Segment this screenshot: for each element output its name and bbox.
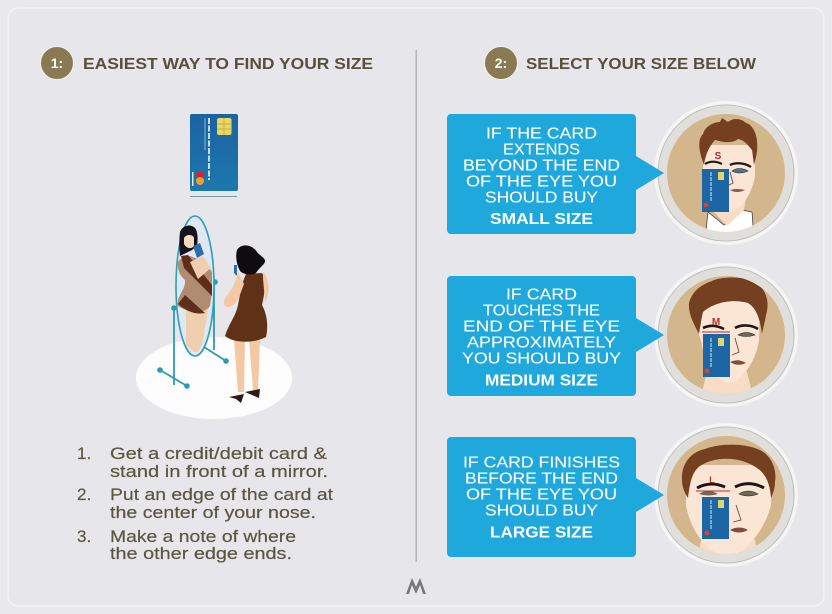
callout: small size: OF THE EYE YOU — [466, 174, 617, 190]
callout: medium size: IF CARD — [506, 286, 577, 304]
instructions list: Get a credit/debit card & — [110, 444, 328, 463]
heading 1: EASIEST WAY TO FIND YOUR SIZE — [83, 56, 373, 73]
heading 1: 1: — [51, 55, 63, 71]
illustration: woman at mirror — [136, 216, 292, 419]
instructions list: stand in front of a mirror. — [110, 462, 328, 481]
portrait: medium size: M — [712, 317, 720, 328]
heading 1 — [40, 46, 373, 80]
callout: medium size — [447, 276, 664, 396]
portrait: medium size — [654, 263, 798, 407]
instructions list: 3. — [77, 527, 91, 546]
instructions list: 1. — [77, 444, 91, 463]
portrait: large size: L — [709, 475, 715, 485]
callout: medium size: MEDIUM SIZE — [485, 372, 598, 390]
heading 2 — [484, 46, 757, 80]
floor ellipse — [136, 337, 292, 419]
callout: small size: IF THE CARD — [486, 126, 597, 142]
heading 2: SELECT YOUR SIZE BELOW — [526, 56, 757, 73]
callout: small size: EXTENDS — [503, 142, 580, 158]
instructions list: Make a note of where — [110, 527, 296, 546]
callout: large size: IF CARD FINISHES — [463, 454, 620, 472]
instructions list — [77, 444, 333, 563]
callout: large size: SHOULD BUY — [485, 502, 598, 520]
callout: small size — [447, 114, 664, 234]
brand logo — [406, 578, 426, 594]
instructions list: the other edge ends. — [110, 544, 292, 563]
callout: small size: SHOULD BUY — [485, 190, 598, 206]
illustration: credit card — [190, 114, 238, 196]
mirror — [157, 216, 229, 389]
portrait: small size: S — [715, 151, 722, 162]
instructions list: the center of your nose. — [110, 503, 316, 522]
instructions list: 2. — [77, 485, 91, 504]
heading 2: 2: — [495, 55, 507, 71]
callout: medium size: APPROXIMATELY — [467, 334, 616, 352]
reflection — [178, 225, 212, 352]
callout: small size: BEYOND THE END — [463, 158, 620, 174]
callout: large size — [447, 437, 664, 557]
instructions list: Put an edge of the card at — [110, 485, 333, 504]
callout: medium size: YOU SHOULD BUY — [462, 350, 621, 368]
portrait: small size — [654, 101, 798, 245]
woman — [224, 245, 269, 403]
callout: large size: OF THE EYE YOU — [466, 486, 617, 504]
divider — [416, 50, 417, 562]
callout: medium size: END OF THE EYE — [463, 318, 620, 336]
callout: large size: BEFORE THE END — [465, 470, 618, 488]
callout: small size: SMALL SIZE — [490, 211, 593, 228]
callout: medium size: TOUCHES THE — [483, 302, 600, 320]
portrait: large size — [654, 423, 798, 567]
callout: large size: LARGE SIZE — [490, 524, 593, 542]
